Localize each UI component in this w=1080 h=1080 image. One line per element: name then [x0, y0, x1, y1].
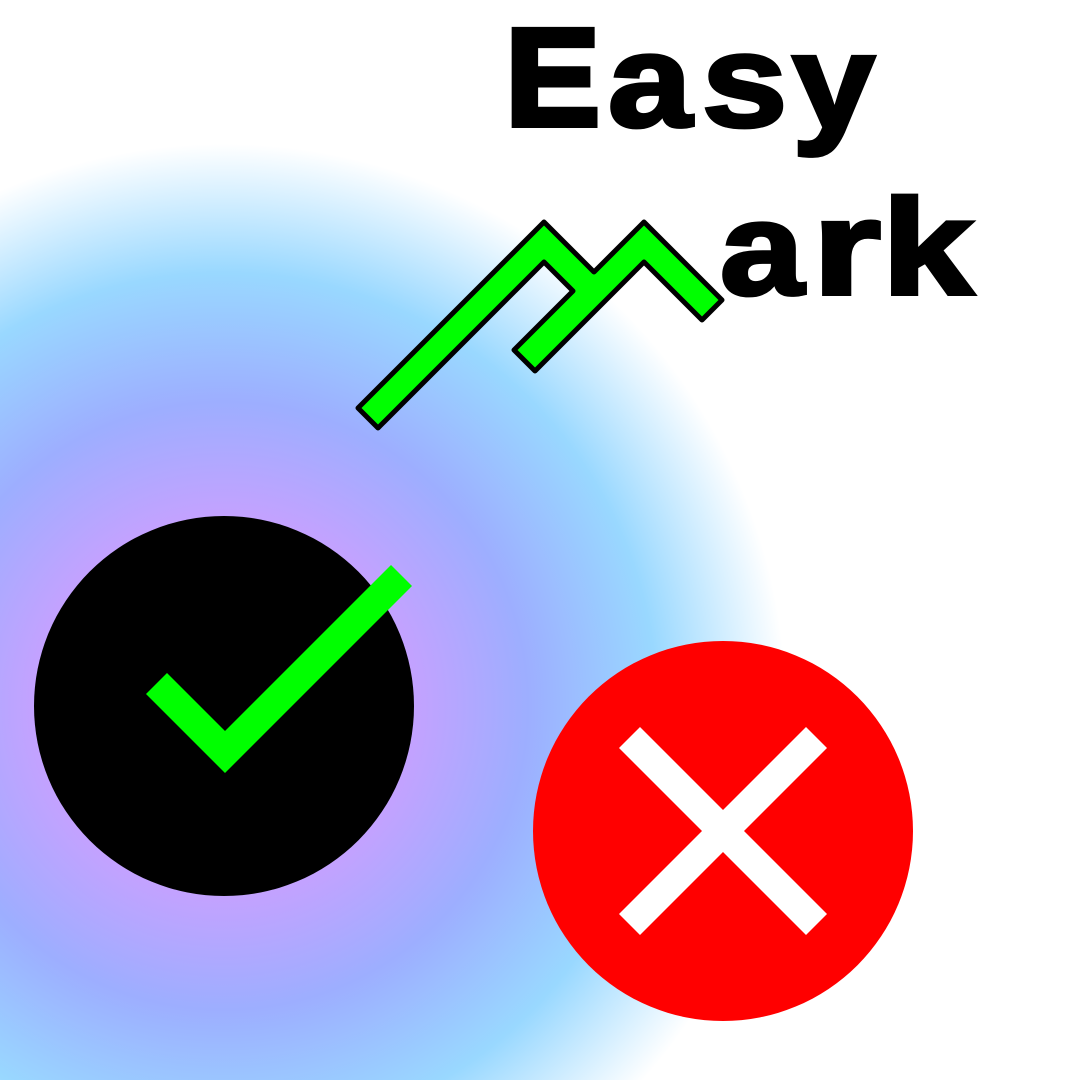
- title: Easy: a: [608, 8, 693, 155]
- title: ark: [720, 172, 975, 324]
- title: Easy: y: [792, 7, 875, 157]
- title: Easy: E: [505, 0, 600, 155]
- icon: red circle with white cross: [533, 641, 913, 1021]
- icon: green M logo: [358, 222, 722, 428]
- title: ark: r: [812, 172, 881, 323]
- title: Easy: s: [702, 7, 787, 155]
- title: ark: k: [882, 172, 975, 324]
- title: Easy: [505, 0, 875, 157]
- icon: black circle with green check: [34, 516, 414, 896]
- title: ark: a: [720, 176, 805, 323]
